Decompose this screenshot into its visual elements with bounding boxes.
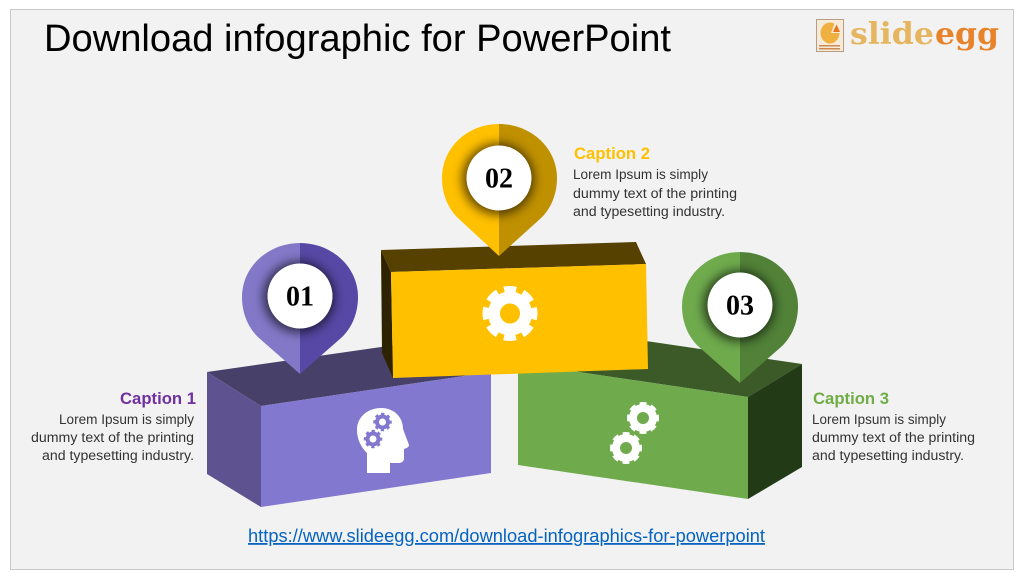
caption 1: Caption 1 xyxy=(120,389,196,408)
caption 2: Lorem Ipsum is simply xyxy=(573,167,708,182)
pin 03 xyxy=(682,252,798,383)
caption 1: and typesetting industry. xyxy=(42,448,194,463)
caption 2 xyxy=(573,144,737,219)
caption 2: Caption 2 xyxy=(574,144,650,163)
icon: gear xyxy=(486,290,534,338)
caption 3: and typesetting industry. xyxy=(812,448,964,463)
pin 02 xyxy=(442,124,557,256)
block 1: purple box xyxy=(207,339,491,507)
caption 1 xyxy=(31,389,196,463)
title: Download infographic for PowerPoint xyxy=(44,18,671,60)
caption 2: and typesetting industry. xyxy=(573,204,725,219)
caption 3: Caption 3 xyxy=(813,389,889,408)
caption 2: dummy text of the printing xyxy=(573,186,737,201)
logo wordmark: egg: egg xyxy=(935,17,999,52)
caption 3 xyxy=(812,389,975,463)
icon: two gears xyxy=(612,404,657,462)
pin 01 xyxy=(242,243,358,374)
icon: logo egg xyxy=(816,20,844,52)
logo wordmark: slide: slide xyxy=(850,17,934,52)
block 3: green box xyxy=(518,330,802,499)
link: https://www.slideegg.com/download-infographics-for-powerpoint xyxy=(248,526,765,546)
block 2: yellow box xyxy=(381,242,648,378)
pin 01: 01 xyxy=(286,282,314,312)
caption 3: Lorem Ipsum is simply xyxy=(812,412,946,427)
caption 1: dummy text of the printing xyxy=(31,430,194,445)
caption 1: Lorem Ipsum is simply xyxy=(59,412,194,427)
pin 02: 02 xyxy=(485,164,513,194)
icon: head with gears xyxy=(357,408,409,473)
caption 3: dummy text of the printing xyxy=(812,430,975,445)
pin 03: 03 xyxy=(726,290,754,322)
logo: slideegg xyxy=(816,17,934,52)
